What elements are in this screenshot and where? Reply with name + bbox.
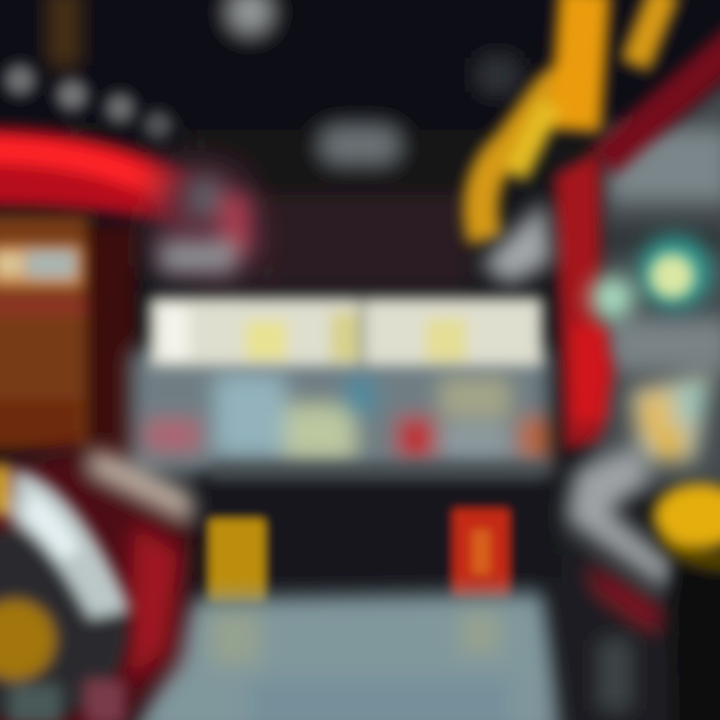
floor — [130, 592, 575, 720]
right upper red beam — [590, 15, 720, 175]
yellow neon lettering — [481, 0, 665, 240]
red neon band — [0, 128, 195, 228]
foreground wheel — [0, 465, 130, 720]
mid grey sign under lettering — [480, 200, 552, 285]
left sign: bright label — [0, 245, 82, 287]
back lightbox sign — [150, 298, 542, 366]
ceiling lights row, left — [4, 64, 172, 139]
left column: brown panel — [0, 215, 136, 465]
left foreground machine — [0, 445, 195, 720]
right red pillar — [555, 150, 615, 450]
right wall glow core — [650, 254, 694, 298]
right counter — [550, 445, 690, 720]
right wall poster — [630, 372, 712, 462]
right foreground black column — [675, 560, 720, 720]
ceiling — [0, 0, 720, 290]
right wall glowing display — [590, 236, 711, 320]
yellow bin — [208, 518, 266, 603]
back counter shelves — [130, 350, 550, 475]
yellow foreground object — [654, 484, 720, 571]
red bin — [452, 508, 510, 598]
dark base counter — [200, 462, 550, 587]
left rear display — [150, 160, 262, 285]
left rear display highlights — [160, 180, 250, 272]
right wall shelving — [590, 70, 720, 490]
